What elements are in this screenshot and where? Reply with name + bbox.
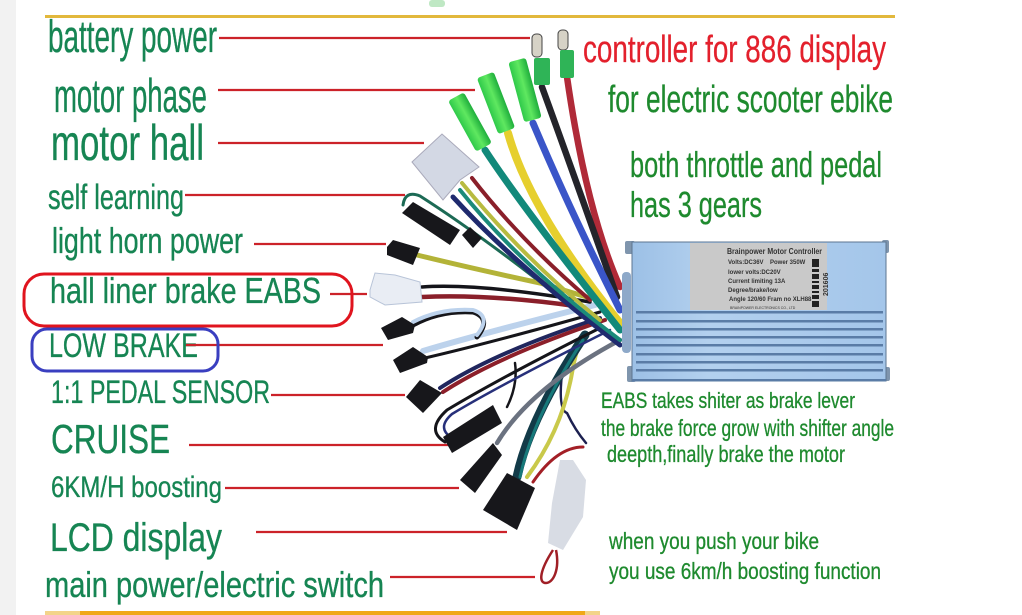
subheading: for electric scooter ebike: for electric scooter ebike — [608, 79, 893, 121]
note: has 3 gears: has 3 gears — [630, 184, 762, 225]
EABS note: the brake force grow with shifter angle — [601, 415, 894, 441]
housing — [632, 242, 886, 381]
cooling fins — [632, 311, 886, 382]
label: battery power: battery power — [48, 11, 217, 62]
black connectors — [381, 202, 535, 530]
product label: Power 350W — [770, 260, 806, 266]
right title text — [583, 29, 893, 225]
lower wires — [403, 194, 620, 482]
product label: Brainpower Motor Controller — [727, 247, 822, 256]
label: LOW BRAKE: LOW BRAKE — [49, 327, 198, 365]
top rule — [45, 15, 895, 18]
connectors — [370, 30, 586, 583]
boosting note — [608, 528, 881, 584]
red switch loop — [541, 550, 557, 583]
label: light horn power: light horn power — [52, 220, 243, 261]
note: both throttle and pedal: both throttle and pedal — [630, 144, 882, 185]
product label: Volts:DC36V — [728, 260, 764, 266]
EABS note: deepth,finally brake the motor — [607, 441, 845, 467]
heading: controller for 886 display: controller for 886 display — [583, 29, 886, 71]
product label — [690, 243, 830, 310]
label: main power/electric switch: main power/electric switch — [45, 564, 384, 605]
green terminal caps — [448, 58, 542, 152]
white switch connector — [548, 460, 586, 550]
blue highlight: LOW BRAKE — [32, 329, 218, 371]
product label: Current limiting 13A — [728, 279, 786, 285]
motor controller box — [622, 240, 890, 382]
label: 6KM/H boosting: 6KM/H boosting — [51, 471, 222, 504]
bullet terminals — [532, 30, 574, 85]
white multi-pin connector — [412, 134, 479, 200]
EABS note: EABS takes shiter as brake lever — [601, 388, 855, 413]
label: motor hall: motor hall — [51, 115, 204, 171]
product label: Angle 120/60 Fram no XLH88 — [729, 297, 812, 303]
white brake connector — [370, 273, 422, 305]
red leader lines — [185, 38, 535, 577]
left labels — [45, 11, 384, 605]
label: hall liner brake EABS: hall liner brake EABS — [50, 270, 321, 311]
label: motor phase: motor phase — [54, 69, 207, 122]
bottom rule — [45, 611, 600, 615]
label: 1:1 PEDAL SENSOR: 1:1 PEDAL SENSOR — [51, 374, 270, 410]
label: self learning: self learning — [48, 178, 184, 217]
product label: 201606 — [823, 273, 830, 296]
boosting note: when you push your bike — [608, 528, 819, 554]
boosting note: you use 6km/h boosting function — [609, 558, 881, 584]
barcode — [812, 259, 819, 307]
product label: lower volts:DC20V — [728, 270, 781, 276]
label: LCD display: LCD display — [50, 516, 222, 560]
wire harness — [403, 77, 620, 482]
mounting ears — [625, 240, 890, 382]
side plate — [622, 272, 631, 353]
product label: BRAINPOWER ELECTRONICS CO., LTD — [730, 306, 796, 310]
EABS note — [601, 388, 894, 467]
label: CRUISE: CRUISE — [51, 416, 170, 462]
top fragment — [429, 0, 445, 7]
red highlight: hall liner brake EABS — [24, 274, 352, 326]
upper wires — [453, 77, 620, 345]
product label: Degree/brake/low — [728, 288, 778, 294]
